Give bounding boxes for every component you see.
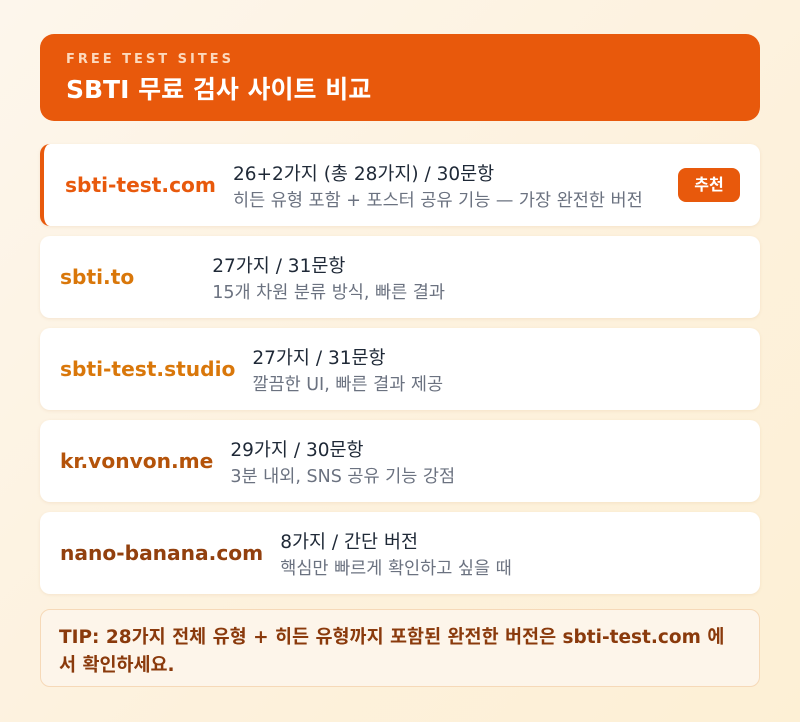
row: nano-banana.com: [40, 512, 760, 594]
row: sbti.to: 15개 차원 분류 방식, 빠른 결과: [212, 283, 445, 303]
tip: [40, 609, 760, 687]
row: kr.vonvon.me: [40, 420, 760, 502]
row: sbti.to: sbti.to: [60, 265, 134, 289]
row: sbti-test.studio: sbti-test.studio: [60, 357, 235, 381]
row: sbti-test.studio: [40, 328, 760, 410]
row: kr.vonvon.me: kr.vonvon.me: [60, 449, 213, 473]
row: sbti-test.studio: 27가지 / 31문항: [252, 348, 386, 369]
row: sbti-test.com: [40, 144, 760, 226]
row: sbti.to: [40, 236, 760, 318]
row: nano-banana.com: 8가지 / 간단 버전: [280, 532, 418, 553]
row: kr.vonvon.me: 29가지 / 30문항: [230, 440, 364, 461]
badge: 추천: [694, 175, 724, 194]
header: [40, 34, 760, 121]
row: sbti-test.com: 26+2가지 (총 28가지) / 30문항: [233, 164, 494, 185]
row: sbti.to: 27가지 / 31문항: [212, 256, 345, 277]
badge: [678, 168, 740, 202]
row: nano-banana.com: nano-banana.com: [60, 541, 263, 565]
row: kr.vonvon.me: 3분 내외, SNS 공유 기능 강점: [230, 467, 455, 487]
row: sbti-test.com: 히든 유형 포함 + 포스터 공유 기능 — 가장 완전한 버전: [233, 191, 643, 211]
row: sbti-test.com: sbti-test.com: [65, 173, 216, 197]
header: FREE TEST SITES: [66, 52, 234, 67]
header: SBTI 무료 검사 사이트 비교: [66, 75, 371, 104]
tip: TIP: 28가지 전체 유형 + 히든 유형까지 포함된 완전한 버전은 sbti-test.com 에서 확인하세요.: [59, 627, 724, 676]
row: nano-banana.com: 핵심만 빠르게 확인하고 싶을 때: [280, 559, 512, 579]
row: sbti-test.studio: 깔끔한 UI, 빠른 결과 제공: [252, 375, 443, 395]
